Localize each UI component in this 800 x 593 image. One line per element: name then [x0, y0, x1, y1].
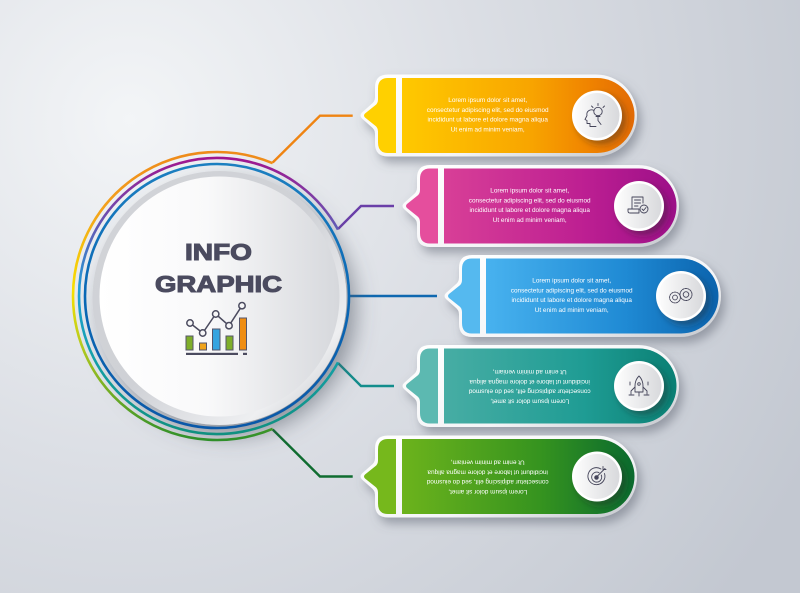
icon: rocket [614, 361, 664, 411]
panel: card 2 magenta [402, 165, 679, 247]
text: card 4 upside down: consectetur adipiscing elit, sed do eiusmod [468, 388, 591, 395]
connector: purple [338, 206, 394, 229]
icon: document with check [614, 181, 664, 231]
text: card 1: Lorem ipsum dolor sit amet, [448, 97, 527, 104]
connector: orange [273, 116, 353, 162]
text: card 1: consectetur adipiscing elit, sed do eiusmod [427, 107, 549, 114]
text: card 1: Ut enim ad minim veniam, [451, 126, 525, 134]
icon: target [572, 452, 622, 502]
text: card 5 upside down: Lorem ipsum dolor sit amet, [448, 488, 527, 495]
text: card 5 upside down: Ut enim ad minim veniam, [451, 458, 525, 466]
panel: card 3 blue [444, 255, 721, 337]
disc face [100, 176, 340, 416]
panel: card 4 teal [402, 345, 679, 427]
text: card 2: incididunt ut labore et dolore magna aliqua [469, 207, 590, 214]
title [155, 239, 282, 297]
text: card 3: incididunt ut labore et dolore magna aliqua [511, 297, 632, 304]
text: card 1 [427, 97, 549, 134]
text: card 5 upside down: consectetur adipiscing elit, sed do eiusmod [426, 478, 549, 485]
connector: green [273, 430, 353, 476]
text: card 4 upside down: Ut enim ad minim veniam, [493, 368, 567, 375]
main circle with rings [73, 152, 349, 440]
panel: card 5 green [360, 436, 637, 518]
text: card 4 upside down: Lorem ipsum dolor sit amet, [490, 398, 569, 404]
title: INFO [185, 239, 252, 265]
title: GRAPHIC [155, 271, 282, 297]
text: card 1: incididunt ut labore et dolore magna aliqua [427, 117, 548, 124]
text: card 2: Lorem ipsum dolor sit amet, [490, 188, 569, 194]
connector: teal [338, 363, 394, 386]
text: card 3: Ut enim ad minim veniam, [535, 307, 609, 314]
panel: card 1 orange [360, 74, 637, 156]
ring: inner blue [85, 164, 349, 428]
icon: bar chart with line [186, 302, 247, 355]
icon: head with lightbulb [572, 90, 622, 140]
ring: middle purple to teal [79, 158, 338, 434]
disc rim [92, 171, 346, 425]
text: card 3: Lorem ipsum dolor sit amet, [532, 278, 611, 284]
text: card 3: consectetur adipiscing elit, sed do eiusmod [511, 287, 633, 294]
text: card 4 upside down [468, 368, 591, 404]
text: card 5 upside down: incididunt ut labore et dolore magna aliqua [427, 468, 548, 475]
ring: outer orange to green [73, 152, 273, 440]
text: card 2 [469, 188, 591, 224]
icon: gears [656, 271, 706, 321]
text: card 2: Ut enim ad minim veniam, [493, 217, 567, 224]
text: card 2: consectetur adipiscing elit, sed do eiusmod [469, 197, 591, 204]
text: card 3 [511, 278, 633, 314]
text: card 4 upside down: incididunt ut labore et dolore magna aliqua [469, 378, 590, 385]
text: card 5 upside down [426, 458, 549, 495]
connector: blue [349, 295, 437, 297]
